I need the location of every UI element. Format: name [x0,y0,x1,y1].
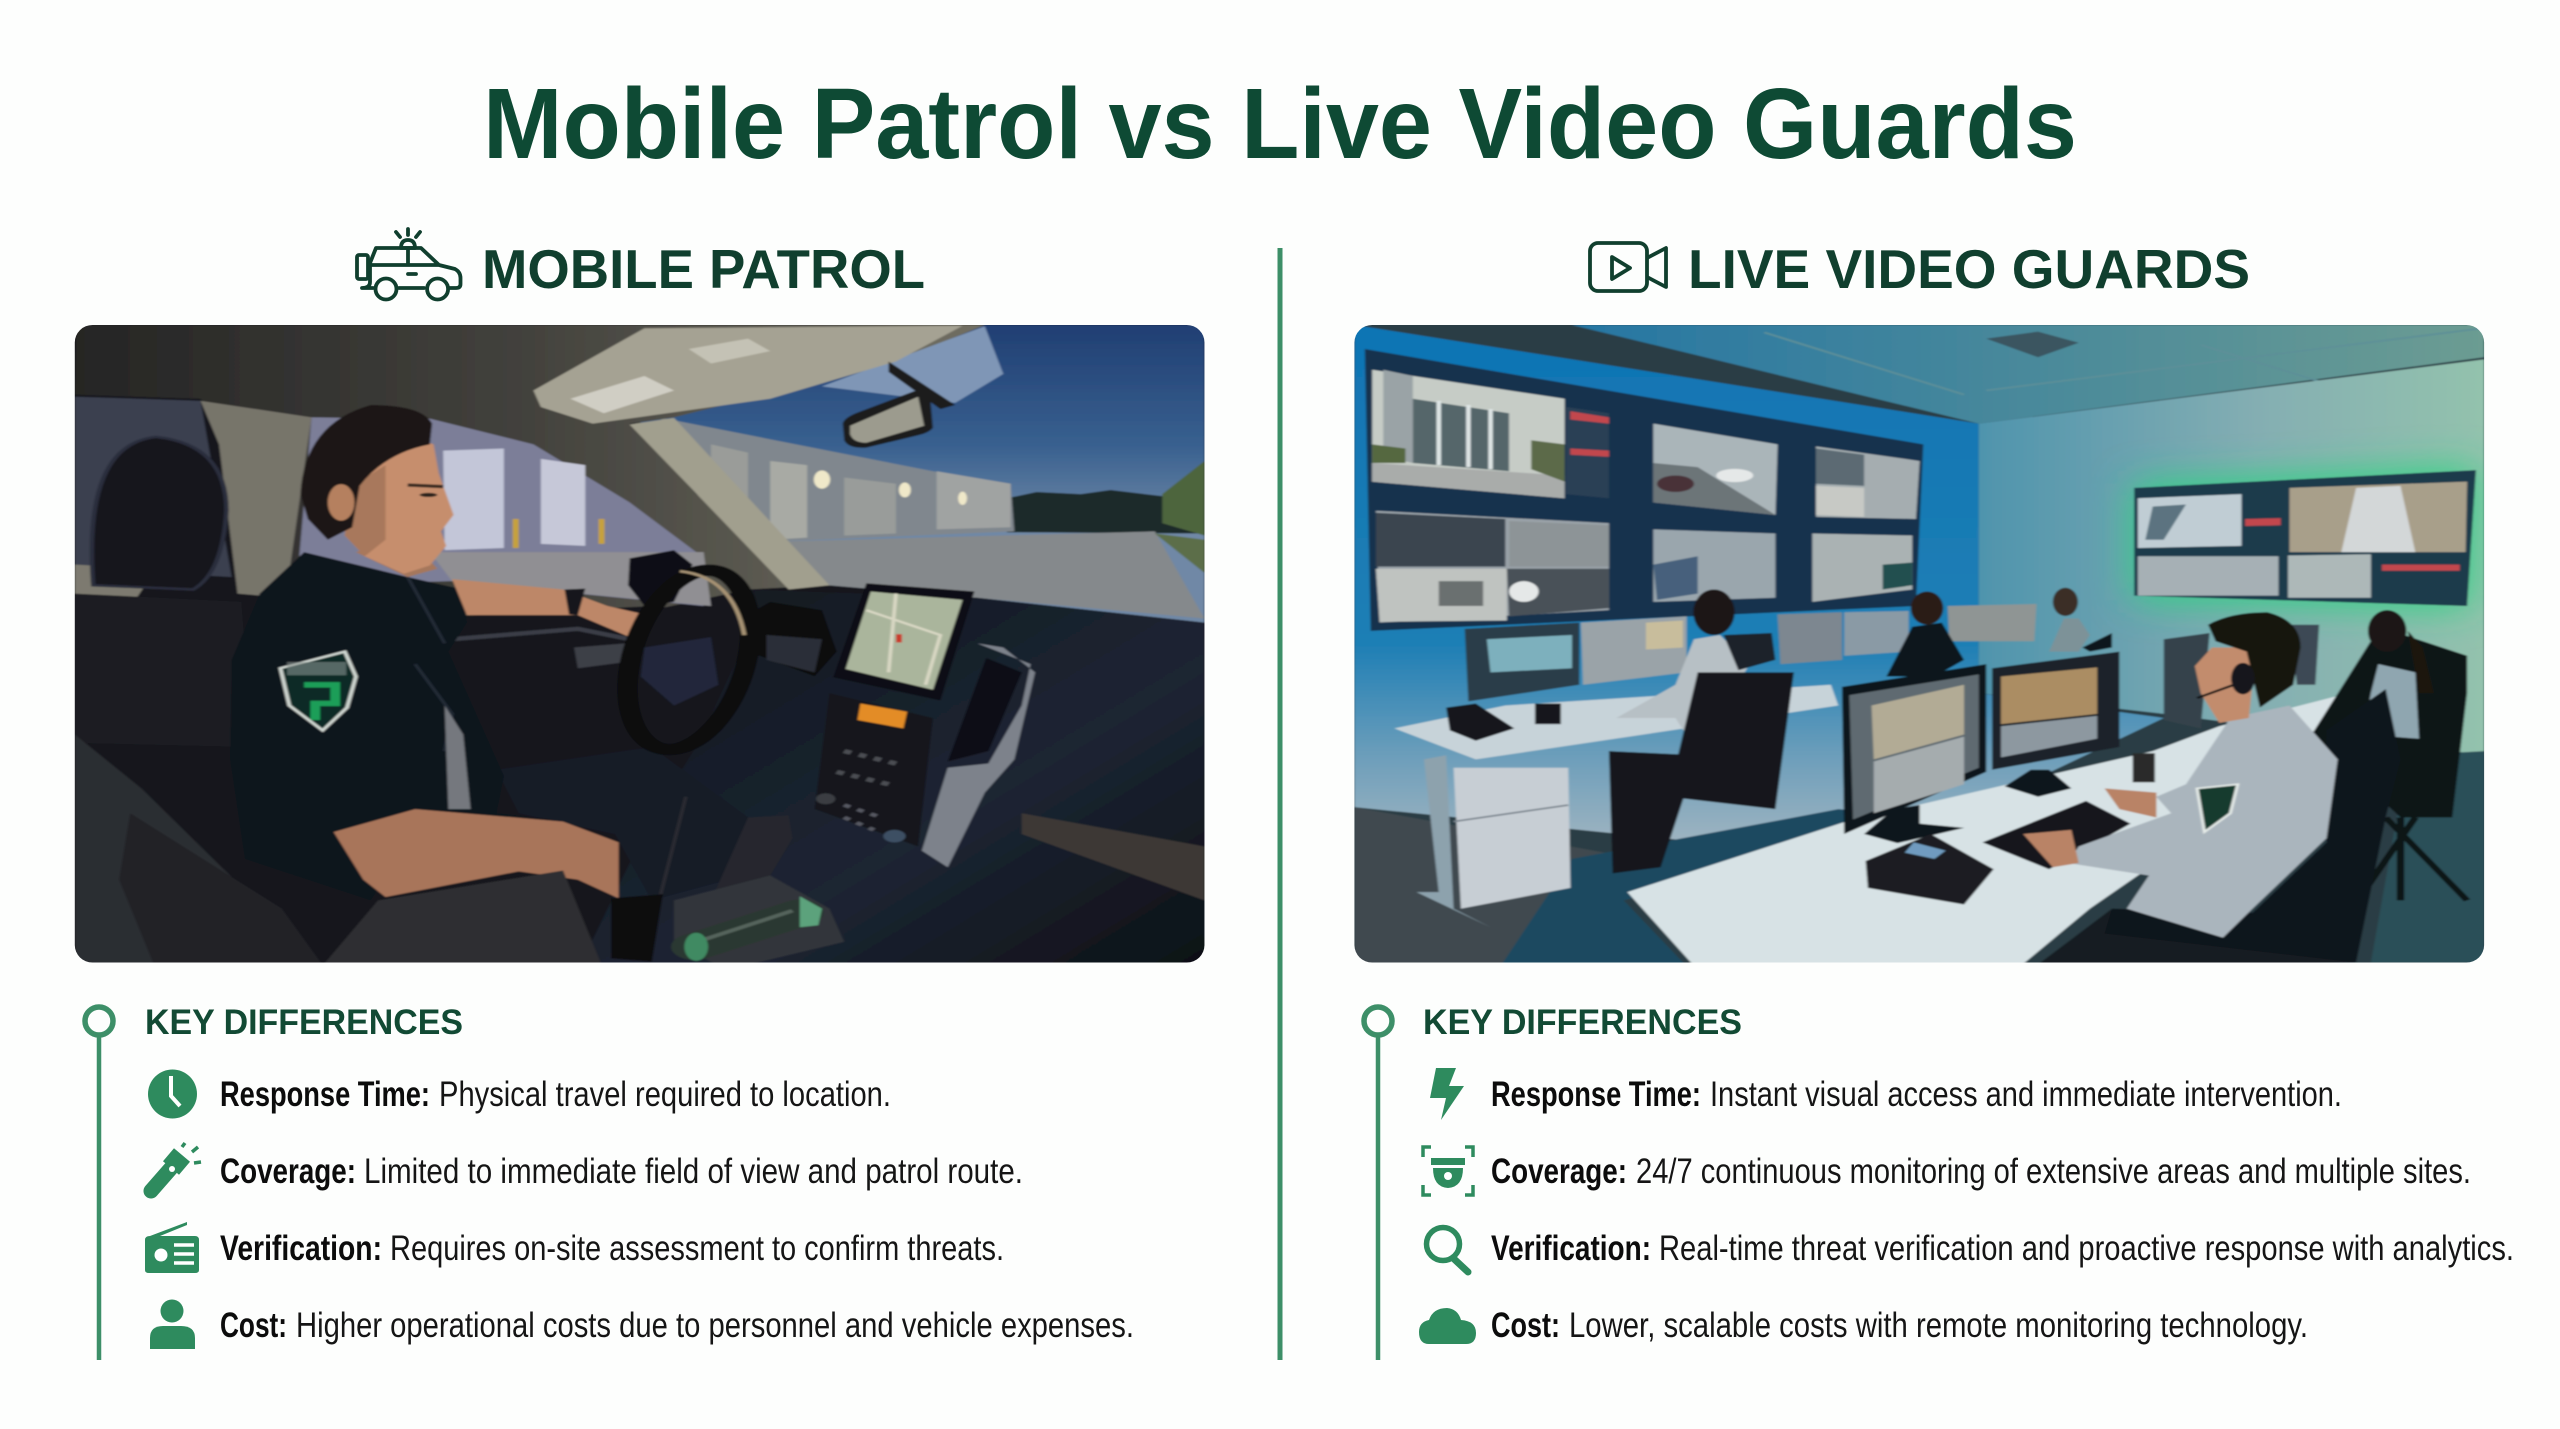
row: verification [145,1222,1004,1273]
row: coverage [1423,1147,2471,1195]
row: response time [148,1070,891,1118]
row text [220,1229,1004,1268]
timeline marker [1364,1007,1392,1360]
row: response time [1430,1068,2342,1120]
heading text: LIVE VIDEO GUARDS [1688,238,2250,300]
row text: Lower, scalable costs with remote monitoring technology. [1569,1306,2308,1345]
row text: Coverage: [1491,1152,1627,1191]
panel: mobile patrol [60,229,1220,1360]
row text: Instant visual access and immediate intervention. [1710,1075,2342,1114]
heading: live video guards [1590,238,2250,300]
key differences: mobile patrol [85,1003,1134,1360]
heading text: MOBILE PATROL [482,238,925,300]
panel: live video guards [1350,238,2514,1360]
icon: video camera [1590,243,1666,291]
heading: mobile patrol [357,229,925,300]
row text: Cost: [1491,1306,1560,1345]
row text: Physical travel required to location. [439,1075,891,1114]
row text: Requires on-site assessment to confirm threats. [390,1229,1004,1268]
divider between columns [1278,248,1282,1360]
row text [220,1075,891,1114]
icon: patrol car [357,229,460,300]
row text: Cost: [220,1306,287,1345]
icon: magnifying glass [1426,1228,1468,1272]
row text [1491,1075,2342,1114]
row text: Verification: [220,1229,382,1268]
photo: officer in patrol car [74,325,1204,962]
icon: person [150,1300,195,1349]
row text: Verification: [1491,1229,1651,1268]
row: verification [1426,1228,2514,1272]
subheading: KEY DIFFERENCES [1423,1003,1742,1042]
icon: cloud [1419,1308,1476,1344]
icon: lightning bolt [1430,1068,1464,1120]
row text: Response Time: [1491,1075,1701,1114]
icon: radio [145,1222,199,1273]
title: Mobile Patrol vs Live Video Guards [483,68,2077,180]
icon: security camera [1423,1147,1473,1195]
photo: video monitoring room [1354,325,2484,962]
row: coverage [151,1143,1023,1191]
row text: Limited to immediate field of view and patrol route. [364,1152,1023,1191]
icon: clock [148,1070,197,1118]
timeline marker [85,1007,113,1360]
row text: Coverage: [220,1152,356,1191]
row text: Response Time: [220,1075,430,1114]
row: cost [1419,1306,2308,1345]
subheading: KEY DIFFERENCES [145,1003,463,1042]
row: cost [150,1300,1134,1349]
key differences: live video guards [1364,1003,2514,1360]
icon: flashlight [151,1143,201,1191]
row text: Higher operational costs due to personnel and vehicle expenses. [296,1306,1134,1345]
